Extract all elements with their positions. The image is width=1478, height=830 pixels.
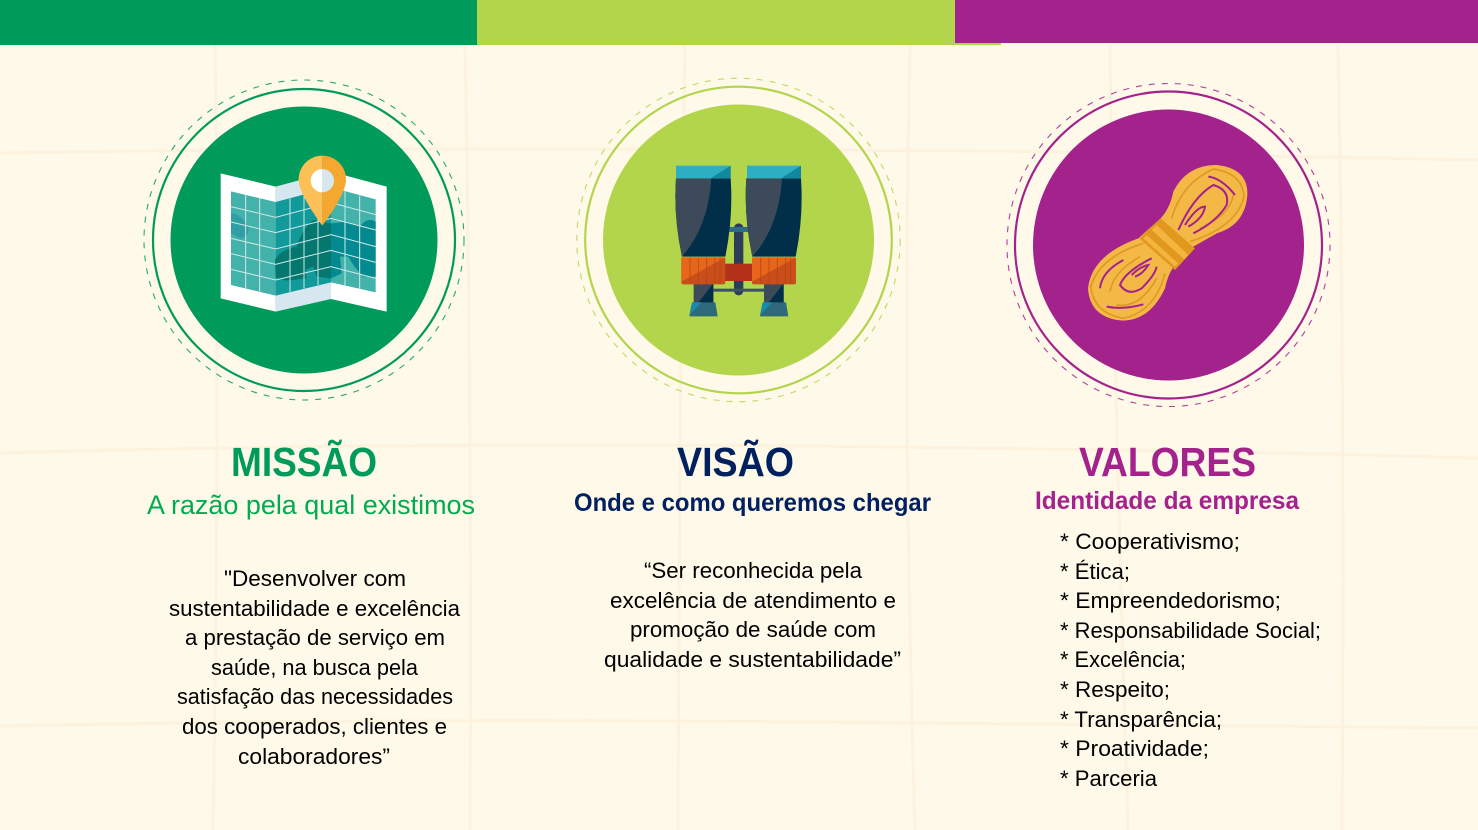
list: valores: * Responsabilidade Social; [1060, 618, 1321, 643]
heading: visão: VISÃO [677, 439, 794, 485]
icon: coiled rope [1088, 165, 1247, 321]
text block: missão: "Desenvolver com [224, 566, 406, 591]
text block: visão: qualidade e sustentabilidade” [604, 647, 901, 672]
heading: missão: MISSÃO [231, 439, 377, 485]
subheading: missão: A razão pela qual existimos [147, 490, 475, 520]
text block: visão [604, 558, 901, 672]
icon: folded map with pin [221, 156, 387, 312]
top color bar [0, 0, 1478, 45]
list: valores: * Proatividade; [1060, 736, 1209, 761]
text block: missão: colaboradores” [238, 744, 390, 769]
list: valores: * Empreendedorismo; [1060, 588, 1281, 613]
icon badge: map [144, 80, 464, 400]
icon: binoculars [675, 166, 802, 316]
list: valores: * Cooperativismo; [1060, 529, 1240, 554]
panel: missão [144, 80, 475, 769]
list: valores [1060, 529, 1321, 791]
panel: visão [574, 78, 931, 672]
text block: missão: dos cooperados, clientes e [182, 714, 447, 739]
list: valores: * Transparência; [1060, 707, 1222, 732]
text block: missão: a prestação de serviço em [185, 625, 445, 650]
list: valores: * Respeito; [1060, 677, 1170, 702]
subheading: visão: Onde e como queremos chegar [574, 489, 931, 517]
list: valores: * Ética; [1060, 559, 1130, 584]
panel: valores [1007, 84, 1330, 791]
text block: missão: saúde, na busca pela [211, 655, 418, 680]
text block: visão: excelência de atendimento e [610, 588, 896, 613]
text block: missão: satisfação das necessidades [177, 684, 453, 709]
icon badge: binoculars [577, 78, 900, 402]
subheading: valores: Identidade da empresa [1035, 487, 1300, 515]
text block: missão [169, 566, 460, 769]
list: valores: * Parceria [1060, 766, 1157, 791]
list: valores: * Excelência; [1060, 647, 1186, 672]
text block: missão: sustentabilidade e excelência [169, 596, 460, 621]
text block: visão: “Ser reconhecida pela [644, 558, 862, 583]
text block: visão: promoção de saúde com [630, 617, 876, 642]
heading: valores: VALORES [1079, 439, 1256, 485]
icon badge: rope [1007, 84, 1330, 406]
